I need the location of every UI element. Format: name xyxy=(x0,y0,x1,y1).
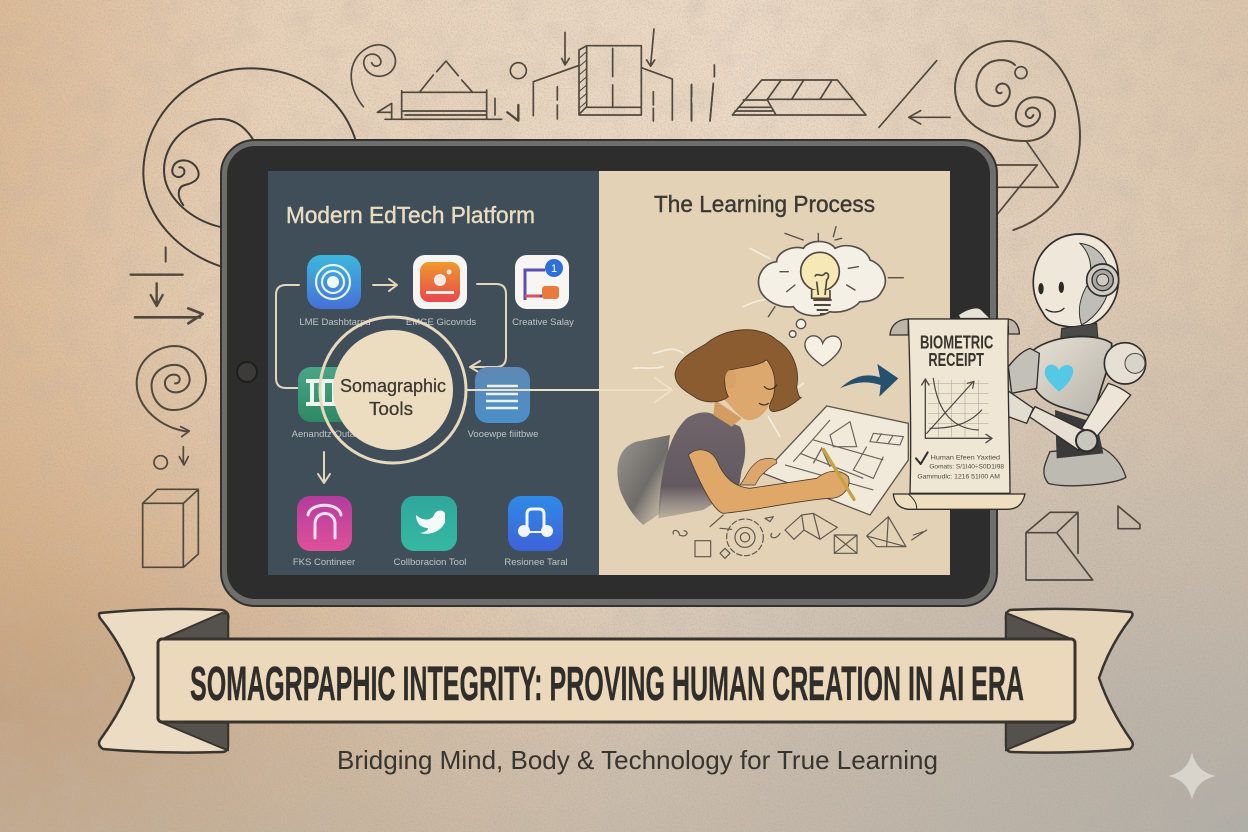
thought bubbles xyxy=(789,319,806,337)
receipt details: Human Efeen Yaxtied xyxy=(931,454,1000,461)
panel: The Learning Process xyxy=(599,171,950,575)
shirt xyxy=(658,412,745,518)
title ribbon xyxy=(99,609,1133,753)
robot right arm xyxy=(1082,383,1131,437)
motion marks xyxy=(633,248,803,437)
robot waist xyxy=(1055,410,1103,458)
doodle: bottom right cube and triangle xyxy=(1026,506,1140,580)
doodle: trapezoid and right spiral xyxy=(691,41,1080,230)
icon: document tool xyxy=(475,367,530,423)
icon: camera dot xyxy=(237,362,257,382)
subtitle: Bridging Mind, Body & Technology for True Learning xyxy=(337,745,938,775)
robot right shoulder xyxy=(1104,343,1146,384)
illustration: girl drawing with idea cloud xyxy=(617,227,927,558)
arrows: platform flow xyxy=(276,279,506,483)
icon: LME Dashboard xyxy=(307,255,361,309)
robot left arm xyxy=(1008,348,1039,393)
biometric receipt scroll: Gammudlc: 1216 51I00 AM xyxy=(917,474,1000,481)
label: LME Dashboard: LME Dashbtarpd xyxy=(299,317,371,328)
biometric receipt scroll: Gomats: S/1I40÷S0D1I98 xyxy=(929,464,1004,471)
geometry doodles xyxy=(673,513,927,558)
ribbon band xyxy=(158,639,1075,722)
label: image tool: EMGE Gicovnds xyxy=(406,317,476,328)
doodle: left column arrows, spiral and cube xyxy=(131,247,206,567)
connector: tools to learning process xyxy=(467,378,672,402)
ear xyxy=(725,370,736,389)
neck xyxy=(713,400,742,427)
robot elbow xyxy=(1076,430,1097,451)
robot head xyxy=(1033,234,1119,327)
robot neck xyxy=(1060,323,1098,352)
label: document tool: Vooewpe fiiitbwe xyxy=(468,429,538,440)
doodle: top centre architecture with arrows xyxy=(510,29,714,121)
face xyxy=(720,360,777,420)
ribbon right tail xyxy=(1006,609,1133,753)
biometric receipt scroll xyxy=(890,319,1025,509)
receipt chart xyxy=(922,378,992,443)
tablet xyxy=(221,140,997,606)
hub: Somagraphic Tools: Tools xyxy=(369,399,413,419)
panel: Modern EdTech Platform xyxy=(268,171,599,575)
arm xyxy=(688,450,849,513)
idea cloud xyxy=(759,227,903,317)
label: FKS Contineer: FKS Contineer xyxy=(293,557,355,568)
hub: Somagraphic Tools xyxy=(320,317,466,463)
robot holding biometric receipt xyxy=(890,234,1146,509)
doodle: large left spiral xyxy=(143,68,355,267)
robot heart xyxy=(1045,365,1073,392)
heading: Modern EdTech Platform: Modern EdTech Platform xyxy=(286,202,535,228)
icon: image tool xyxy=(413,255,467,309)
robot pointing hand xyxy=(985,387,1033,423)
icon: Creative Salay: 1 xyxy=(551,263,557,275)
ribbon left tail xyxy=(99,609,228,753)
ribbon folds xyxy=(160,613,1074,750)
label: Resionee Taral: Resionee Taral xyxy=(504,557,568,568)
closed eye and smile xyxy=(759,385,777,405)
robot hips xyxy=(1044,447,1126,486)
icon: Creative Salay xyxy=(515,255,569,309)
pencil xyxy=(823,449,854,499)
tablet bezel xyxy=(227,146,990,599)
label: green tool: Aenandtz Outan xyxy=(292,429,360,440)
label: Collaboration Tool: Collboracion Tool xyxy=(394,557,466,568)
icon: Collaboration Tool xyxy=(401,496,457,551)
robot hand on scroll xyxy=(958,308,990,318)
tablet body xyxy=(221,140,997,606)
robot torso xyxy=(1030,337,1112,417)
check mark xyxy=(916,452,928,464)
icon: green tool xyxy=(298,367,352,422)
icon: sparkle watermark xyxy=(1168,752,1216,800)
hub: Somagraphic Tools: Somagraphic xyxy=(340,376,446,396)
heart xyxy=(805,336,841,366)
paper with diagrams xyxy=(763,406,908,515)
robot forearm xyxy=(1029,407,1083,450)
chair xyxy=(617,435,670,525)
label: Creative Salay: Creative Salay xyxy=(512,317,574,328)
icon: Resionee Taral xyxy=(508,496,563,551)
far hand xyxy=(740,458,777,485)
doodle: top sketch of bench and triangle xyxy=(351,45,518,121)
biometric receipt scroll: RECEIPT xyxy=(928,349,984,370)
icon: FKS Contineer xyxy=(297,496,352,551)
heading: The Learning Process: The Learning Process xyxy=(654,191,875,217)
receipt title: BIOMETRIC xyxy=(920,332,993,353)
arrow to receipt xyxy=(840,364,898,397)
hair xyxy=(675,330,802,412)
